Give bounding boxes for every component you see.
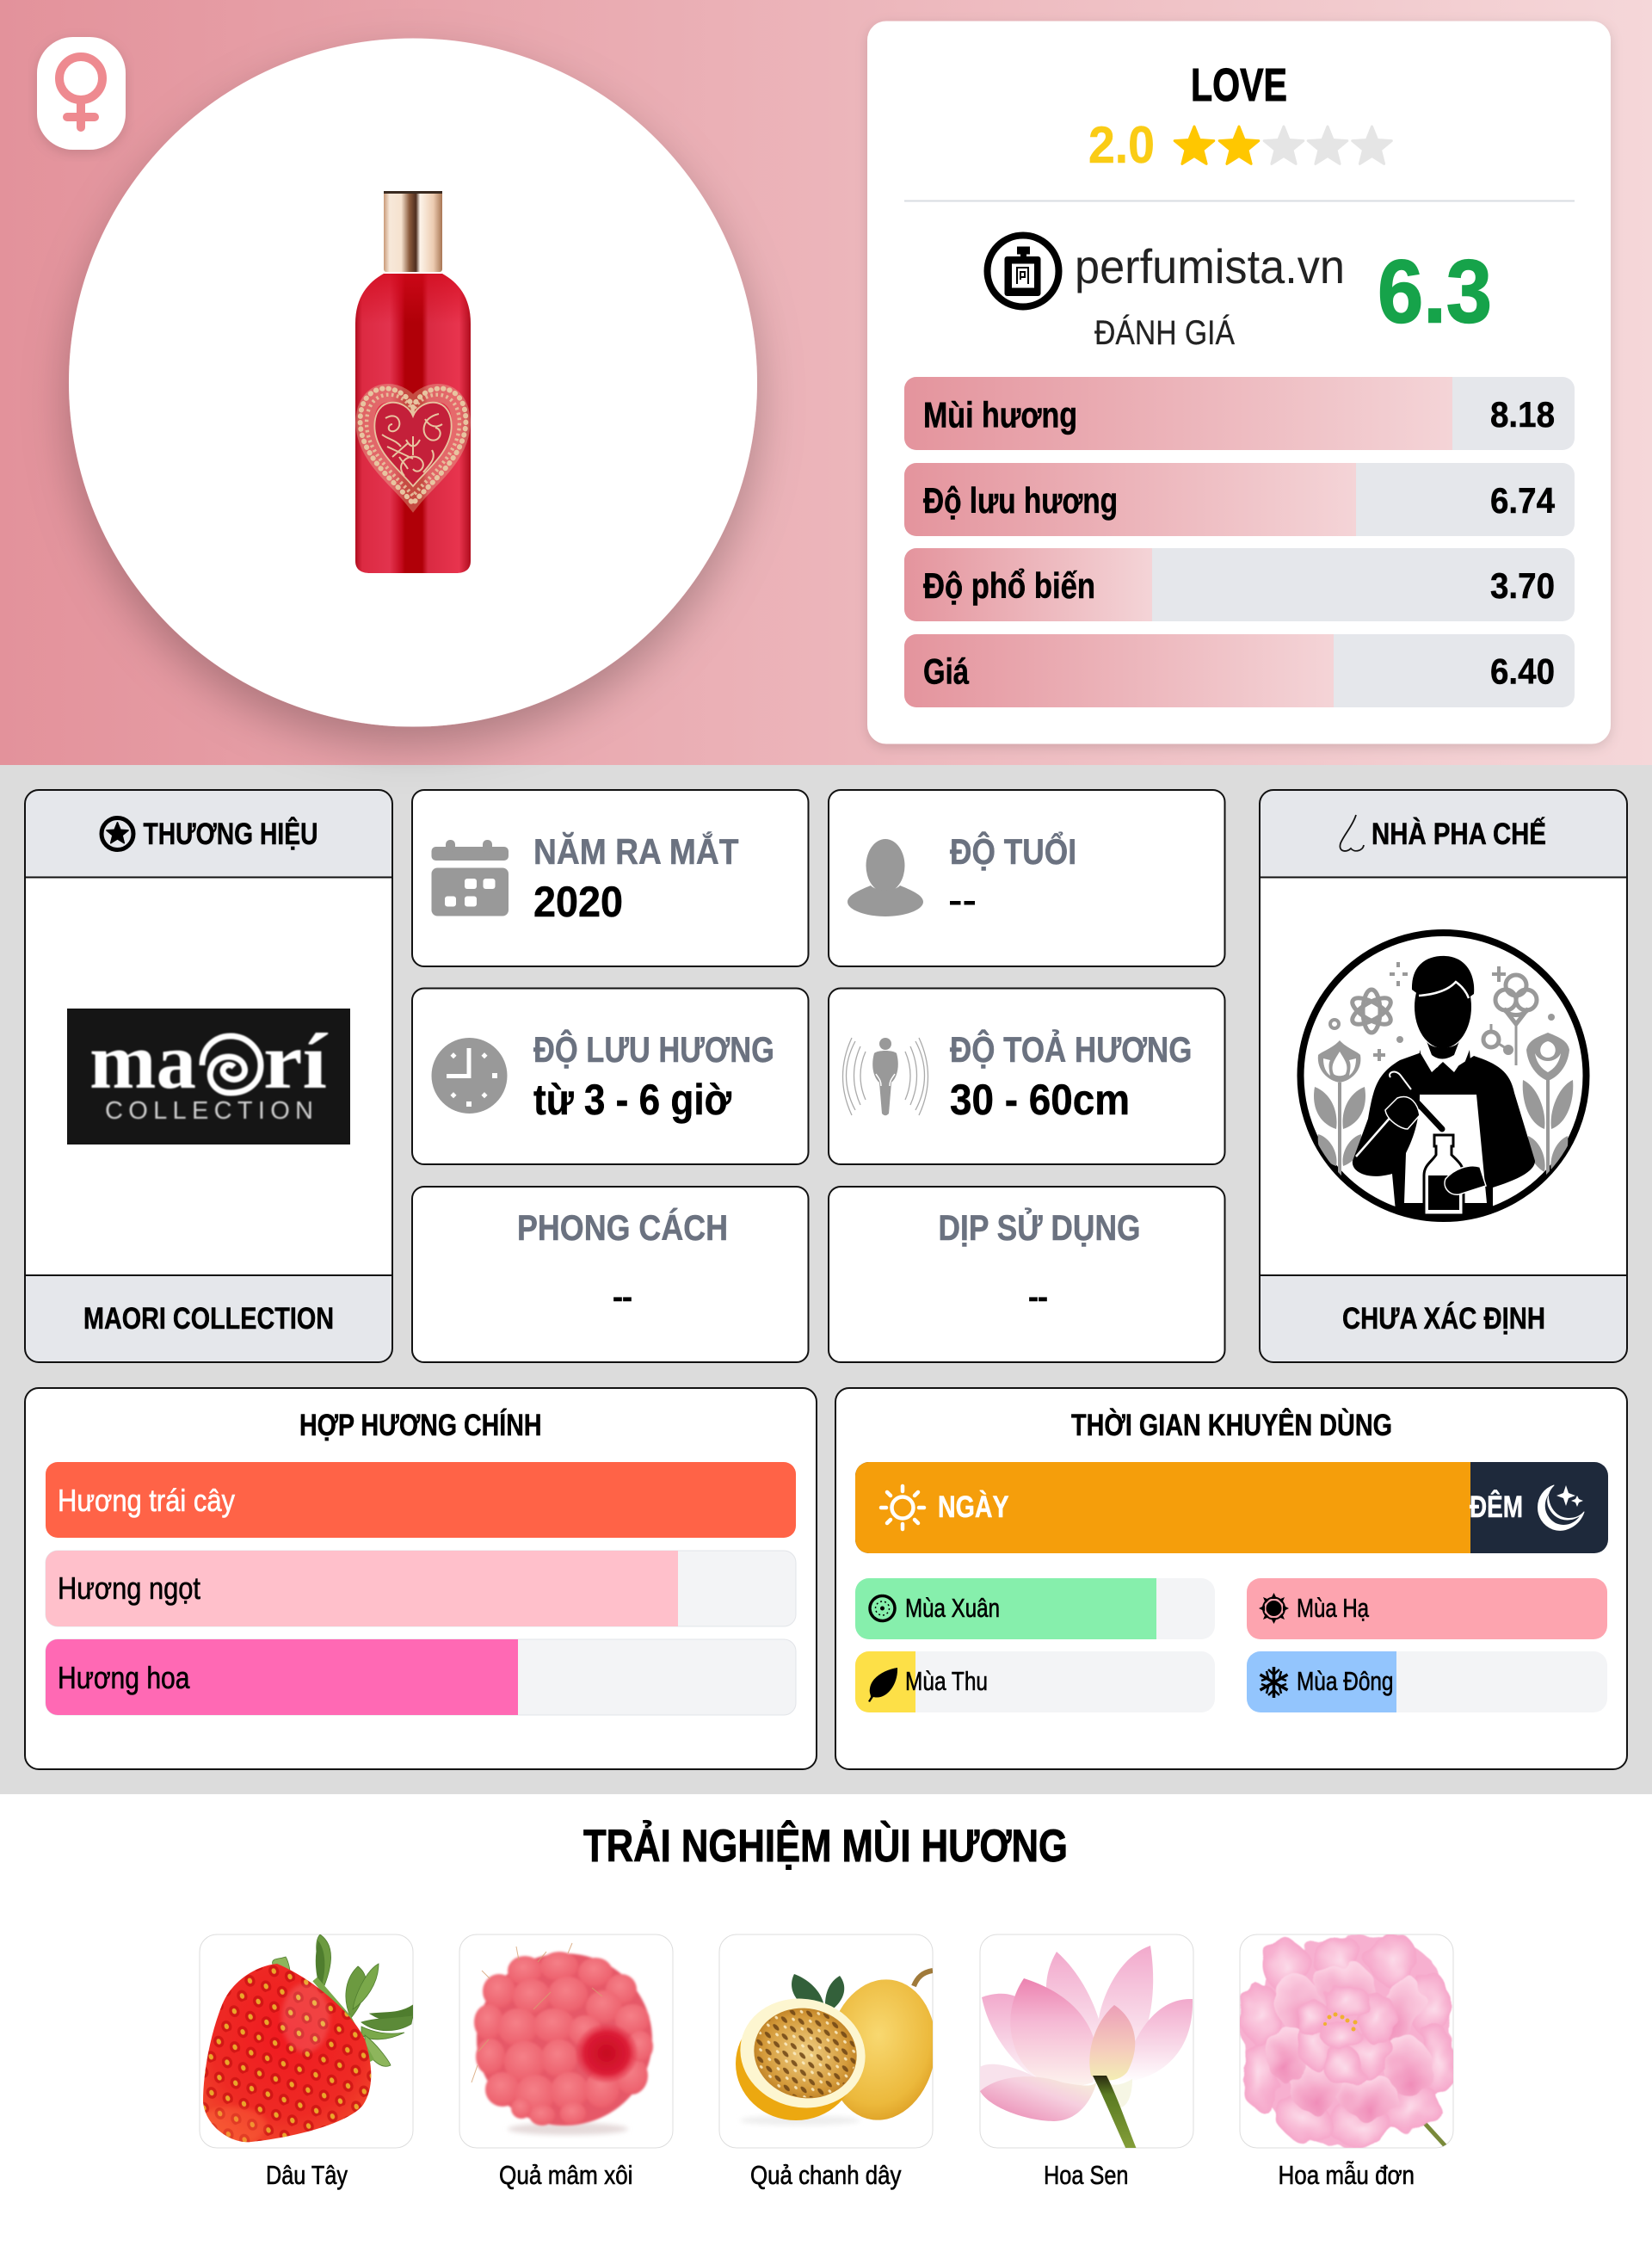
panel: occasion xyxy=(829,1187,1225,1362)
score bar: Mùi hương: 8.18 xyxy=(1490,394,1555,435)
product image circle xyxy=(69,38,757,726)
flowers xyxy=(1314,962,1573,1194)
icon: nose xyxy=(1340,815,1364,851)
panel: style xyxy=(412,1187,809,1362)
label: Hoa mẫu đơn xyxy=(1279,2160,1415,2190)
perfumer illustration xyxy=(1301,933,1587,1239)
icon: sun xyxy=(881,1486,924,1529)
overall score: 6.3 xyxy=(1378,243,1492,342)
label: Quả mâm xôi xyxy=(499,2160,633,2190)
forearm and dropper xyxy=(1368,1119,1369,1120)
score bar: Độ lưu hương: Độ lưu hương xyxy=(923,480,1118,521)
icon: moon xyxy=(1538,1485,1584,1530)
night label: ĐÊM xyxy=(1470,1490,1523,1524)
icon: person xyxy=(848,839,923,916)
panel: age xyxy=(829,790,1225,966)
age label: ĐỘ TUỔI xyxy=(950,830,1076,872)
brand logo: Maori Collection: COLLECTION xyxy=(105,1097,313,1125)
brand name: MAORI COLLECTION xyxy=(83,1302,334,1336)
brand logo: Maori Collection xyxy=(67,1009,350,1145)
perfumer name: CHƯA XÁC ĐỊNH xyxy=(1342,1301,1545,1336)
longevity label: ĐỘ LƯU HƯƠNG xyxy=(533,1028,774,1070)
note: lotus xyxy=(980,1934,1193,2151)
season bar: Mùa Hạ: Mùa Hạ xyxy=(1297,1593,1370,1623)
icon: clock xyxy=(432,1038,508,1114)
brand heading: THƯƠNG HIỆU xyxy=(143,817,318,851)
projection label: ĐỘ TOẢ HƯƠNG xyxy=(950,1028,1193,1070)
accords heading: HỢP HƯƠNG CHÍNH xyxy=(299,1408,542,1442)
perfume bottle xyxy=(355,191,471,573)
perfumista score label: ĐÁNH GIÁ xyxy=(1094,313,1235,352)
year value: 2020 xyxy=(533,878,623,926)
score bar: Độ lưu hương xyxy=(904,463,1575,536)
score bar: Độ phổ biến xyxy=(904,548,1575,621)
year label: NĂM RA MẮT xyxy=(533,830,739,872)
accord bar: Hương ngọt xyxy=(46,1551,796,1626)
panel: brand xyxy=(25,790,392,1362)
icon: snowflake xyxy=(1260,1667,1287,1698)
brand logo: Maori Collection: rí xyxy=(263,1017,329,1105)
score bar: Giá: 6.40 xyxy=(1490,651,1555,692)
panel: release year xyxy=(412,790,809,966)
panel: perfumer xyxy=(1260,790,1627,1362)
score bar: Mùi hương: Mùi hương xyxy=(923,394,1077,435)
icon: summer sun xyxy=(1259,1593,1289,1624)
page background: grey section xyxy=(0,765,1652,1794)
score bar: Giá xyxy=(904,634,1575,707)
icon: calendar xyxy=(432,840,509,916)
season bar: Mùa Đông xyxy=(1247,1651,1607,1712)
accord bar: Hương ngọt: Hương ngọt xyxy=(58,1570,200,1606)
accord bar: Hương trái cây xyxy=(46,1462,796,1538)
occasion label: DỊP SỬ DỤNG xyxy=(938,1206,1141,1248)
label: Quả chanh dây xyxy=(750,2160,902,2190)
perfumista logo: perfumista.vn xyxy=(1075,239,1345,293)
projection value: 30 - 60cm xyxy=(950,1076,1130,1124)
accord bar: Hương trái cây: Hương trái cây xyxy=(58,1483,235,1518)
accord bar: Hương hoa xyxy=(46,1639,796,1715)
essence bottle xyxy=(1424,1135,1464,1215)
score bar: Mùi hương xyxy=(904,377,1575,450)
time heading: THỜI GIAN KHUYÊN DÙNG xyxy=(1071,1408,1392,1442)
icon: scent radius xyxy=(843,1038,928,1115)
icon: spring flower xyxy=(870,1595,895,1621)
user rating: 2.0 xyxy=(1088,116,1155,174)
section title: TRẢI NGHIỆM MÙI HƯƠNG xyxy=(583,1819,1068,1872)
season bar: Mùa Thu xyxy=(855,1651,1215,1712)
style value: -- xyxy=(613,1279,632,1314)
perfumer heading: NHÀ PHA CHẾ xyxy=(1372,817,1546,851)
panel: main accords xyxy=(25,1388,817,1769)
day night bar xyxy=(855,1462,1608,1553)
perfumista logo xyxy=(988,236,1345,306)
user rating xyxy=(1088,116,1391,174)
season bar: Mùa Xuân: Mùa Xuân xyxy=(905,1593,1000,1623)
longevity value: từ 3 - 6 giờ xyxy=(533,1076,731,1124)
accord bar: Hương hoa: Hương hoa xyxy=(58,1660,190,1695)
scent experience section xyxy=(200,1819,1454,2190)
rating card xyxy=(867,21,1611,743)
hero panel xyxy=(0,0,1652,765)
season bar: Mùa Đông: Mùa Đông xyxy=(1297,1666,1394,1696)
score bar: Độ phổ biến: Độ phổ biến xyxy=(923,565,1095,606)
day label: NGÀY xyxy=(938,1490,1008,1524)
panel: projection xyxy=(829,988,1225,1164)
panel: recommended time xyxy=(835,1388,1627,1769)
season bar: Mùa Xuân xyxy=(855,1578,1215,1639)
product name: LOVE xyxy=(1191,59,1287,111)
score bar: Giá: Giá xyxy=(923,651,969,692)
perfumer body xyxy=(1353,1053,1535,1213)
note: peony xyxy=(1240,1928,1454,2154)
style label: PHONG CÁCH xyxy=(517,1207,728,1248)
icon: autumn leaf xyxy=(868,1668,897,1702)
gender badge: female xyxy=(37,37,126,150)
brand logo: Maori Collection: ma xyxy=(89,1017,196,1105)
season bar: Mùa Hạ xyxy=(1247,1578,1607,1639)
label: Dâu Tây xyxy=(266,2160,348,2190)
panel: longevity xyxy=(412,988,809,1164)
note: strawberry xyxy=(198,1934,413,2148)
note: passion fruit xyxy=(719,1934,945,2148)
occasion value: -- xyxy=(1028,1279,1048,1314)
score bar: Độ phổ biến: 3.70 xyxy=(1490,565,1555,606)
icon: brand star xyxy=(102,818,133,850)
season bar: Mùa Thu: Mùa Thu xyxy=(905,1666,988,1696)
note: raspberry xyxy=(459,1934,673,2148)
score bar: Độ lưu hương: 6.74 xyxy=(1490,480,1556,521)
label: Hoa Sen xyxy=(1044,2160,1129,2190)
